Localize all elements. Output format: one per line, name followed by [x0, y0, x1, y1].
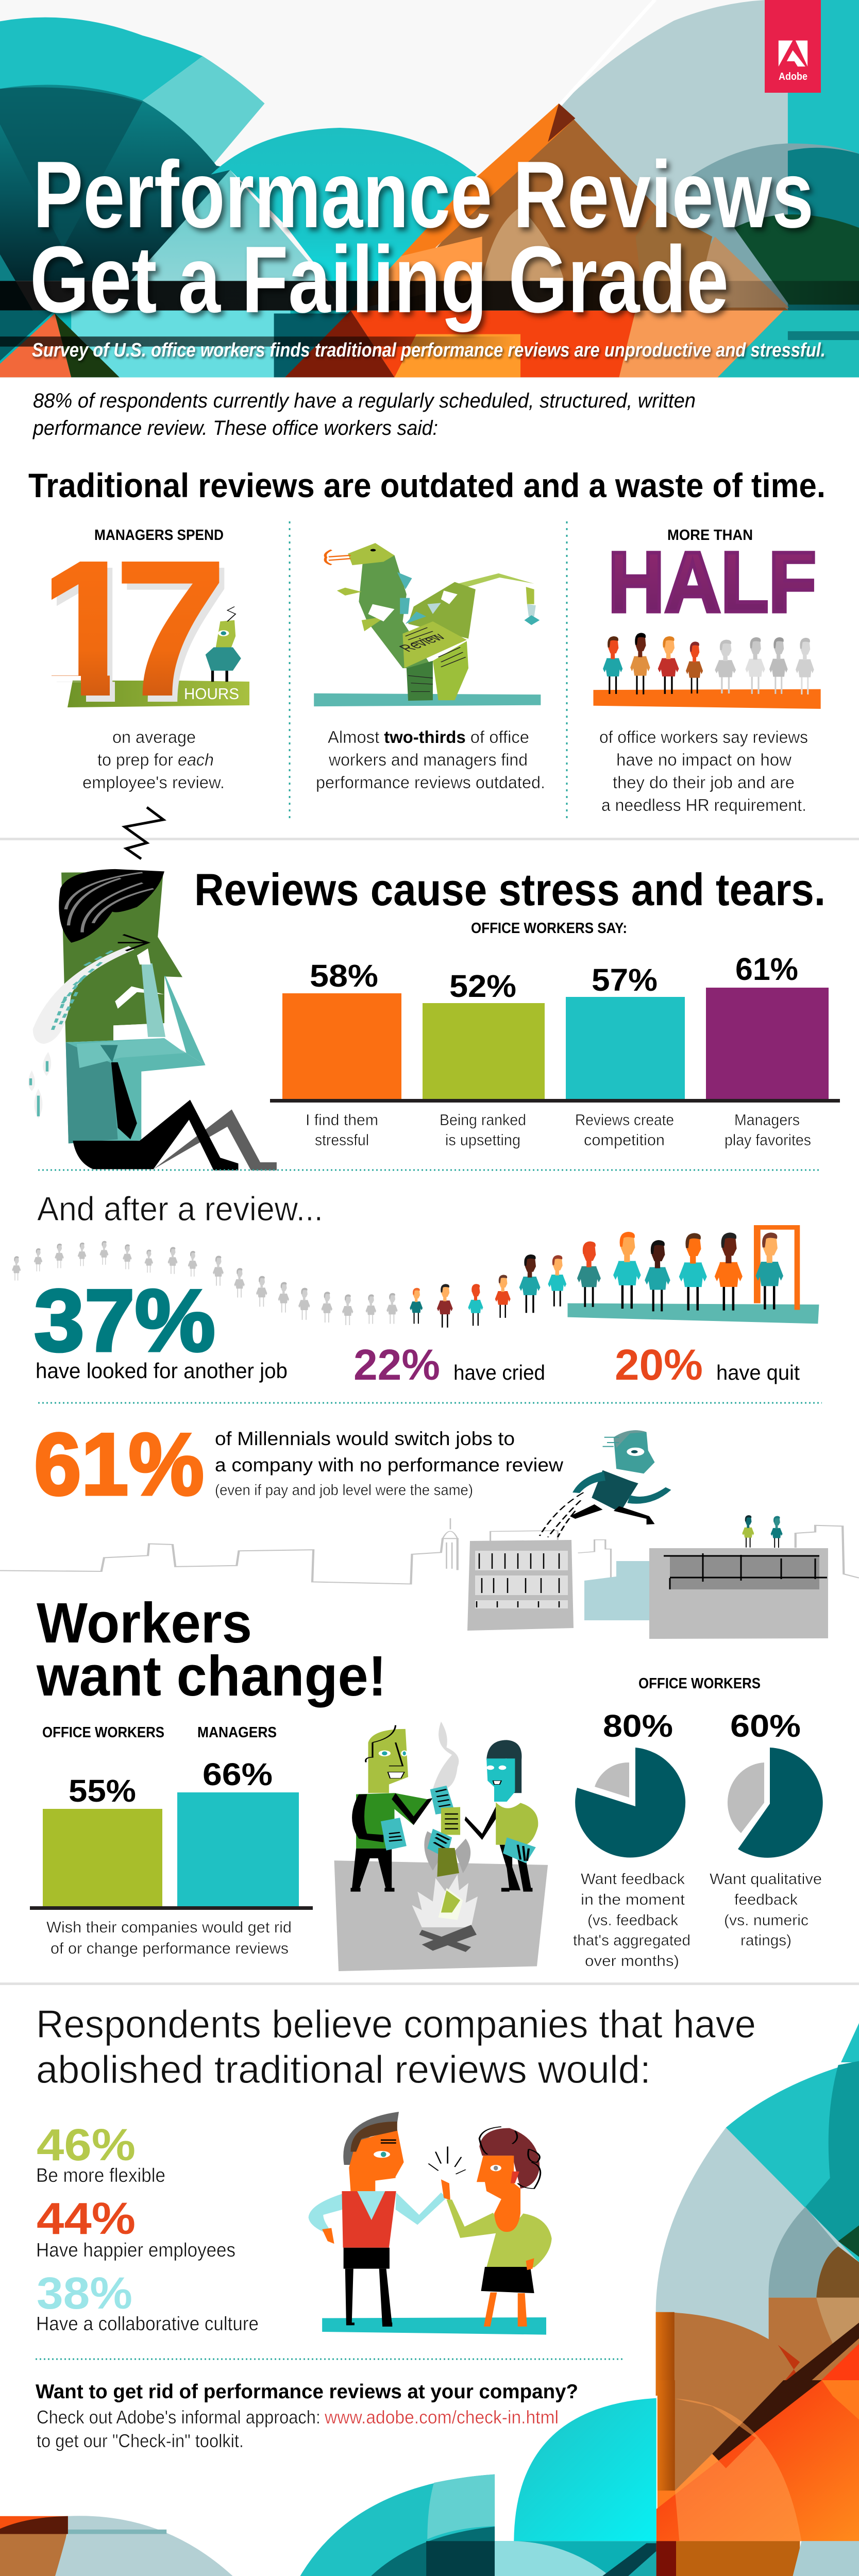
heading: Workers	[37, 1591, 252, 1655]
heading	[36, 1591, 386, 1708]
icon: jumping man	[540, 1430, 671, 1537]
caption	[316, 727, 545, 792]
bar: competition: competition	[584, 1131, 665, 1149]
title	[30, 141, 814, 332]
pie chart: 80%	[573, 1708, 690, 1970]
pie chart: 80%: that's aggregated	[573, 1932, 690, 1949]
stat description	[215, 1428, 563, 1499]
pie chart: 60%: Want qualitative	[710, 1871, 822, 1888]
caption: workers and managers find	[328, 750, 528, 769]
heading: Traditional reviews are outdated and a waste of time.	[28, 466, 826, 504]
caption: employee's review.	[82, 773, 225, 792]
Adobe wordmark: Adobe	[779, 71, 807, 82]
bar: favorites: Managers	[734, 1111, 800, 1129]
caption: Almost two-thirds of office	[328, 727, 529, 747]
panel: after a review	[12, 1190, 822, 1403]
caption: of office workers say reviews	[599, 727, 808, 747]
bar: competition: Reviews create	[575, 1111, 674, 1129]
caption: on average	[112, 727, 196, 747]
caption: they do their job and are	[613, 773, 795, 792]
column: dinosaur	[314, 543, 545, 792]
stat: 46%	[36, 2120, 165, 2187]
pie chart: 80%: (vs. feedback	[587, 1912, 679, 1929]
icon: burning reviews	[334, 1722, 548, 1971]
big number: 1	[29, 520, 146, 737]
stat description: of Millennials would switch jobs to	[215, 1428, 515, 1449]
big number	[52, 562, 225, 702]
bar: ranked	[423, 969, 545, 1149]
stat: 46%: Be more flexible	[36, 2165, 165, 2187]
panel: outdated and waste of time	[28, 466, 826, 819]
call to action: Want to get rid of performance reviews at your company?	[36, 2381, 578, 2403]
label: MORE THAN	[667, 527, 753, 544]
green base	[68, 681, 249, 707]
bar: favorites	[706, 952, 829, 1149]
panel: stress and tears	[28, 807, 840, 1171]
caption: to prep for each	[97, 750, 214, 769]
icon: high five	[309, 2112, 552, 2335]
call to action: Check out Adobe's informal approach:	[37, 2406, 321, 2428]
Adobe tag	[765, 0, 821, 93]
bar chart: companies: Wish their companies would get rid	[46, 1918, 292, 1936]
label: MANAGERS SPEND	[94, 527, 224, 544]
pie chart: 60%: 60%	[730, 1708, 801, 1743]
chart label: OFFICE WORKERS SAY:	[471, 920, 627, 937]
intro text: performance review. These office workers said:	[32, 417, 438, 439]
intro text: 88% of respondents currently have a regularly scheduled, structured, written	[33, 389, 696, 412]
stat: 20%: have quit	[716, 1361, 800, 1384]
icon: crying man	[28, 807, 277, 1171]
skyline	[0, 1518, 859, 1605]
stat: 44%: Have happier employees	[36, 2240, 235, 2261]
pie chart: 80%: 80%	[603, 1708, 673, 1743]
bar chart: companies: MANAGERS	[197, 1724, 277, 1741]
big number: 7	[113, 520, 228, 737]
stat description: (even if pay and job level were the same)	[215, 1482, 473, 1499]
hours label: HOURS	[184, 685, 239, 703]
intro text	[32, 389, 696, 439]
bar chart: companies: of or change performance reviews	[50, 1939, 289, 1957]
artwork: right side shapes	[656, 2023, 859, 2396]
caption: a needless HR requirement.	[601, 795, 806, 815]
pie chart: 80%: in the moment	[581, 1891, 685, 1908]
bar: stressful: stressful	[315, 1131, 369, 1149]
heading	[36, 2003, 756, 2092]
bar chart: companies: OFFICE WORKERS	[42, 1724, 164, 1741]
panel: companies that abolished reviews	[36, 2003, 756, 2451]
pie chart: 80%: over months)	[585, 1953, 679, 1970]
bar: stressful: 58%	[310, 958, 378, 993]
stat: 46%: 46%	[37, 2120, 136, 2170]
bar chart	[270, 952, 840, 1149]
panel: workers want change	[30, 1591, 823, 1971]
column: 17 hours	[52, 530, 249, 792]
stat: 37%: 37%	[34, 1272, 215, 1370]
stat: 38%: Have a collaborative culture	[36, 2313, 259, 2335]
pie chart: 80%: Want feedback	[581, 1871, 685, 1888]
big word: HALF	[608, 535, 816, 630]
bar: competition	[566, 962, 685, 1149]
caption	[599, 727, 808, 815]
call to action: www.adobe.com/check-in.html	[324, 2406, 559, 2428]
caption: have no impact on how	[616, 750, 791, 769]
icon: paper dinosaur	[314, 543, 541, 706]
call to action: to get our "Check-in" toolkit.	[37, 2430, 244, 2451]
stat: 38%: 38%	[37, 2268, 132, 2318]
stat: 38%	[36, 2268, 259, 2335]
stat: 20%: 20%	[615, 1341, 703, 1389]
lower artwork: right side and bottom	[0, 2023, 859, 2576]
stat: 20%	[615, 1341, 800, 1389]
bar chart: companies: 66%	[203, 1757, 273, 1792]
stat: 44%: 44%	[37, 2194, 136, 2244]
stat description: a company with no performance review	[215, 1454, 563, 1476]
icon: Adobe logo	[779, 41, 807, 66]
bar chart: companies	[30, 1724, 313, 1957]
buildings and water	[467, 1540, 828, 1639]
caption: performance reviews outdated.	[316, 773, 545, 792]
column: more than half	[593, 527, 821, 815]
pie chart: 60%: feedback	[734, 1891, 798, 1908]
line of people walking to the door	[12, 1225, 819, 1328]
bar: favorites: 61%	[735, 952, 798, 987]
stat: 22%	[353, 1341, 545, 1389]
stat: 22%: have cried	[453, 1361, 545, 1384]
call to action	[36, 2381, 578, 2451]
pie chart: 60%	[710, 1708, 823, 1949]
bar: ranked: Being ranked	[440, 1111, 526, 1129]
artwork: bottom shapes	[0, 2380, 859, 2576]
bar: stressful	[282, 958, 401, 1149]
header abstract artwork	[0, 0, 859, 377]
bar: favorites: play favorites	[725, 1131, 811, 1149]
heading: abolished traditional reviews would:	[36, 2048, 651, 2092]
bar: ranked: is upsetting	[445, 1131, 520, 1149]
heading: Respondents believe companies that have	[36, 2003, 756, 2046]
panel: millennials	[0, 1415, 859, 1639]
bar: stressful: I find them	[306, 1111, 378, 1129]
caption	[82, 727, 225, 792]
icon: group of workers	[593, 633, 821, 709]
bar: competition: 57%	[592, 962, 658, 997]
heading: And after a review...	[37, 1190, 323, 1228]
stat: 61%: 61%	[34, 1415, 204, 1514]
pie chart: 60%: ratings)	[740, 1932, 791, 1949]
header banner	[0, 0, 859, 377]
stat: 22%: 22%	[353, 1341, 440, 1389]
label: pie charts: OFFICE WORKERS	[638, 1675, 761, 1692]
heading: want change!	[36, 1645, 386, 1708]
icon: paper dinosaur: Review	[395, 631, 449, 654]
bar chart: companies: 55%	[69, 1773, 136, 1808]
icon: stressed manager	[206, 606, 241, 682]
stat: 37%	[34, 1272, 288, 1383]
pie chart: 60%: (vs. numeric	[724, 1912, 809, 1929]
stat: 44%	[36, 2194, 235, 2261]
icon: two onlookers	[742, 1515, 783, 1548]
bar: ranked: 52%	[449, 969, 516, 1004]
stat: 37%: have looked for another job	[36, 1359, 288, 1383]
